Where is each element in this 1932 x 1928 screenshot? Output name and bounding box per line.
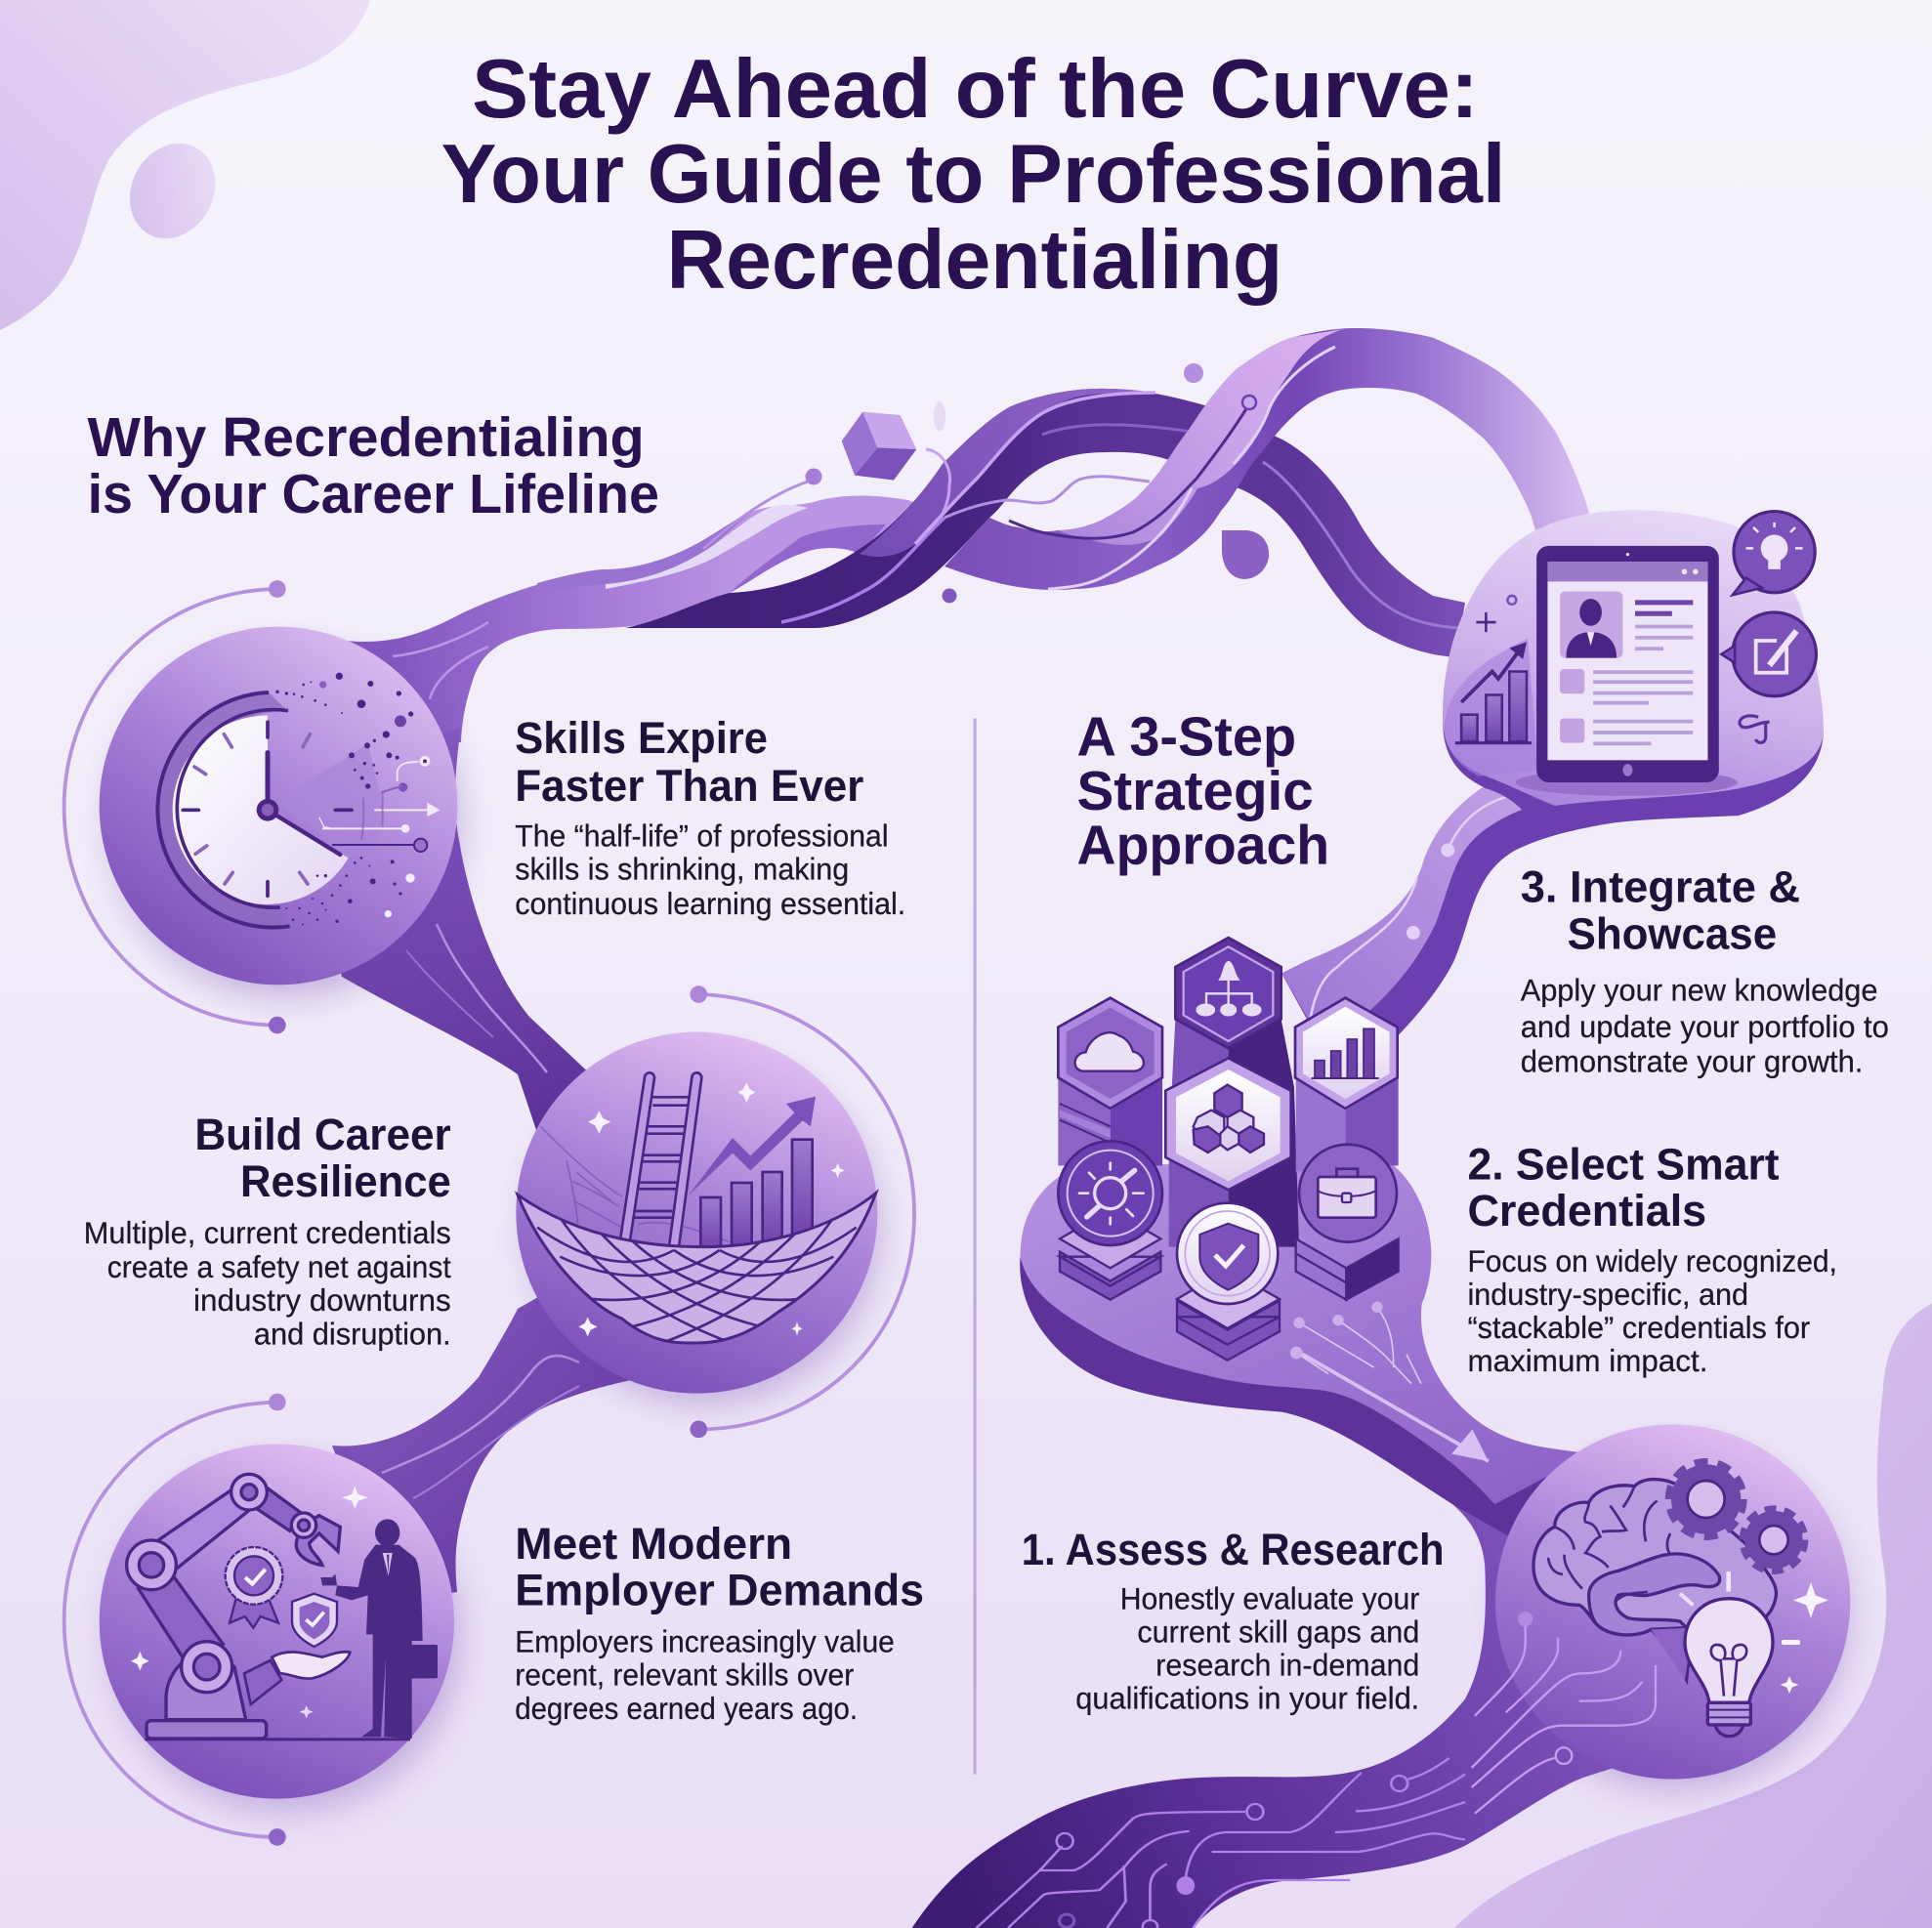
step 1 text: qualifications in your field.	[1075, 1681, 1419, 1716]
icon: edit bubble	[1721, 612, 1816, 696]
ladder	[625, 1077, 696, 1247]
tablet island edge	[1443, 722, 1824, 838]
title	[441, 42, 1506, 307]
heading: 3-step approach: Approach	[1077, 815, 1329, 876]
top-left decorative blob	[0, 0, 369, 330]
award badge	[226, 1547, 282, 1628]
circle 2: safety net	[516, 1032, 877, 1394]
sparkles	[578, 1082, 845, 1336]
stack: right	[1296, 1238, 1399, 1300]
profile photo	[1560, 592, 1622, 658]
employer heading: Employer Demands	[515, 1566, 924, 1615]
heading: why recredentialing: is Your Career Lifeline	[88, 464, 659, 525]
skills heading	[515, 713, 863, 811]
disintegrating particles	[275, 673, 413, 926]
step 3 heading	[1521, 861, 1800, 958]
step 1 text	[1075, 1581, 1419, 1716]
profile text lines	[1635, 600, 1693, 650]
ribbon from platform to tablet island	[1281, 764, 1725, 1084]
resilience heading: Build Career	[194, 1110, 451, 1159]
top-left decorative ellipse	[113, 128, 231, 254]
circle 1: clock	[100, 627, 457, 985]
badge: idea cog	[1058, 1141, 1162, 1245]
icon: growth chart	[1444, 596, 1537, 776]
sparkles	[131, 1487, 368, 1718]
badge: shield	[1177, 1203, 1278, 1304]
neck: circle 1 to circle 2	[293, 728, 596, 1162]
title: Your Guide to Professional	[441, 127, 1506, 221]
platform surface	[1021, 1164, 1589, 1504]
central columns	[1058, 1019, 1399, 1247]
skills text: The “half-life” of professional	[515, 818, 889, 854]
arc around circle 3	[64, 1394, 286, 1846]
step 1	[1022, 1525, 1444, 1716]
step 3 text: Apply your new knowledge	[1521, 972, 1878, 1007]
step 2 text: “stackable” credentials for	[1467, 1310, 1810, 1345]
heading: 3-step approach	[1077, 706, 1329, 876]
employer heading	[515, 1519, 924, 1615]
circle 3: robot and professional	[100, 1444, 454, 1799]
step 3	[1521, 861, 1889, 1079]
arrow on platform	[1294, 1349, 1489, 1461]
clock rings	[157, 692, 290, 928]
gears	[1670, 1463, 1804, 1570]
step 3 text	[1521, 972, 1889, 1079]
employer text: recent, relevant skills over	[515, 1657, 854, 1693]
card: meet modern employer demands	[515, 1519, 924, 1726]
resilience heading	[194, 1110, 451, 1206]
step 2 heading	[1467, 1139, 1780, 1236]
step 1 heading: 1. Assess & Research	[1022, 1525, 1444, 1574]
skills text: continuous learning essential.	[515, 886, 905, 921]
clock face	[173, 716, 349, 904]
skills text	[515, 818, 905, 921]
badge: briefcase	[1299, 1145, 1397, 1242]
tablet	[1536, 546, 1719, 782]
career ribbons	[293, 328, 1589, 1602]
tablet island surface	[1443, 510, 1824, 806]
platform edge	[1020, 1257, 1589, 1540]
step 2 text	[1467, 1243, 1837, 1378]
skills heading: Skills Expire	[515, 713, 768, 763]
growth arrow	[689, 1097, 816, 1195]
floating drop	[1222, 530, 1269, 579]
robot arm	[127, 1474, 340, 1739]
step 2	[1467, 1139, 1837, 1378]
businessman silhouette	[320, 1519, 438, 1739]
light bulb	[1685, 1599, 1773, 1737]
circuit arrows	[319, 756, 441, 917]
resilience text: create a safety net against	[107, 1249, 451, 1284]
lower circuit ribbon	[912, 1479, 1676, 1928]
step 3 heading: 3. Integrate &	[1521, 861, 1800, 911]
hexagon: org chart	[1175, 938, 1281, 1048]
divider line	[974, 718, 977, 1775]
step 3 text: demonstrate your growth.	[1521, 1044, 1863, 1079]
heading: 3-step approach: Strategic	[1077, 761, 1314, 822]
step 2 text: industry-specific, and	[1467, 1277, 1748, 1312]
stack: centre	[1177, 1270, 1280, 1361]
step 3 heading: Showcase	[1568, 908, 1777, 958]
circuit traces on lower ribbon	[977, 1758, 1465, 1928]
card: build career resilience	[84, 1110, 451, 1351]
employer text	[515, 1624, 895, 1726]
back net	[540, 1126, 730, 1242]
ribbon: light strand	[337, 495, 952, 742]
resilience text: Multiple, current credentials	[84, 1215, 451, 1250]
heading: 3-step approach: A 3-Step	[1077, 706, 1296, 768]
bottom-right decorative blob	[1454, 1304, 1932, 1928]
ribbon: dark strand	[625, 389, 1465, 657]
hexagon: cloud	[1058, 998, 1162, 1109]
ribbon: loop band	[945, 328, 1589, 590]
employer heading: Meet Modern	[515, 1519, 792, 1569]
resilience heading: Resilience	[240, 1156, 451, 1206]
hexagon: hexagon cluster	[1165, 1058, 1291, 1190]
title: Stay Ahead of the Curve:	[472, 42, 1479, 136]
illustration layer	[64, 510, 1848, 1928]
tablet shadow	[1516, 769, 1738, 796]
squiggle icon	[1740, 716, 1770, 742]
skills text: skills is shrinking, making	[515, 852, 849, 887]
step 2 heading: Credentials	[1467, 1186, 1706, 1236]
step 1 text: research in-demand	[1155, 1648, 1419, 1683]
hexagon: bar chart	[1295, 998, 1398, 1109]
shield	[292, 1594, 337, 1647]
arc around circle 1	[64, 580, 286, 1033]
ribbon: lavender overlay	[860, 389, 1155, 557]
net	[518, 1194, 876, 1345]
hexagon credential stack	[1058, 938, 1421, 1384]
step 2 heading: 2. Select Smart	[1467, 1139, 1780, 1189]
step 1 text: current skill gaps and	[1137, 1614, 1419, 1650]
employer text: Employers increasingly value	[515, 1624, 895, 1659]
step 2 text: Focus on widely recognized,	[1467, 1243, 1837, 1278]
circle 4: brain and bulb	[1472, 1424, 1850, 1814]
circuit traces	[1472, 1612, 1656, 1814]
list rows	[1560, 669, 1693, 745]
neck: circle 2 to circle 3	[332, 1270, 645, 1602]
resilience text: industry downturns	[193, 1282, 451, 1318]
ground line	[145, 1738, 410, 1740]
connector dot and line	[703, 469, 822, 549]
stack: left	[1060, 1209, 1160, 1300]
robot hand	[244, 1652, 350, 1704]
clock ticks	[183, 722, 352, 896]
rays and sparkles	[1680, 1572, 1828, 1694]
step 3 text: and update your portfolio to	[1521, 1009, 1889, 1044]
circle shadows	[111, 649, 1848, 1811]
clock ring shade	[157, 692, 290, 928]
floating cube	[842, 412, 916, 481]
bar chart	[700, 1140, 813, 1249]
step 2 text: maximum impact.	[1467, 1343, 1707, 1378]
title: Recredentialing	[666, 213, 1282, 307]
heading: why recredentialing	[88, 407, 659, 525]
floating dots	[942, 363, 1203, 604]
clock hands	[257, 753, 340, 855]
employer text: degrees earned years ago.	[515, 1691, 858, 1726]
brain	[1533, 1480, 1776, 1680]
floating petal	[934, 401, 945, 431]
platform circuit lines	[1290, 1302, 1421, 1384]
card: skills expire	[515, 713, 905, 921]
step 1 text: Honestly evaluate your	[1120, 1581, 1419, 1616]
resilience text	[84, 1215, 451, 1351]
arc around circle 2	[690, 985, 914, 1438]
icon: light bulb bubble	[1733, 512, 1815, 595]
resilience text: and disruption.	[254, 1316, 451, 1351]
heading: why recredentialing: Why Recredentialing	[88, 407, 645, 469]
skills heading: Faster Than Ever	[515, 761, 863, 811]
